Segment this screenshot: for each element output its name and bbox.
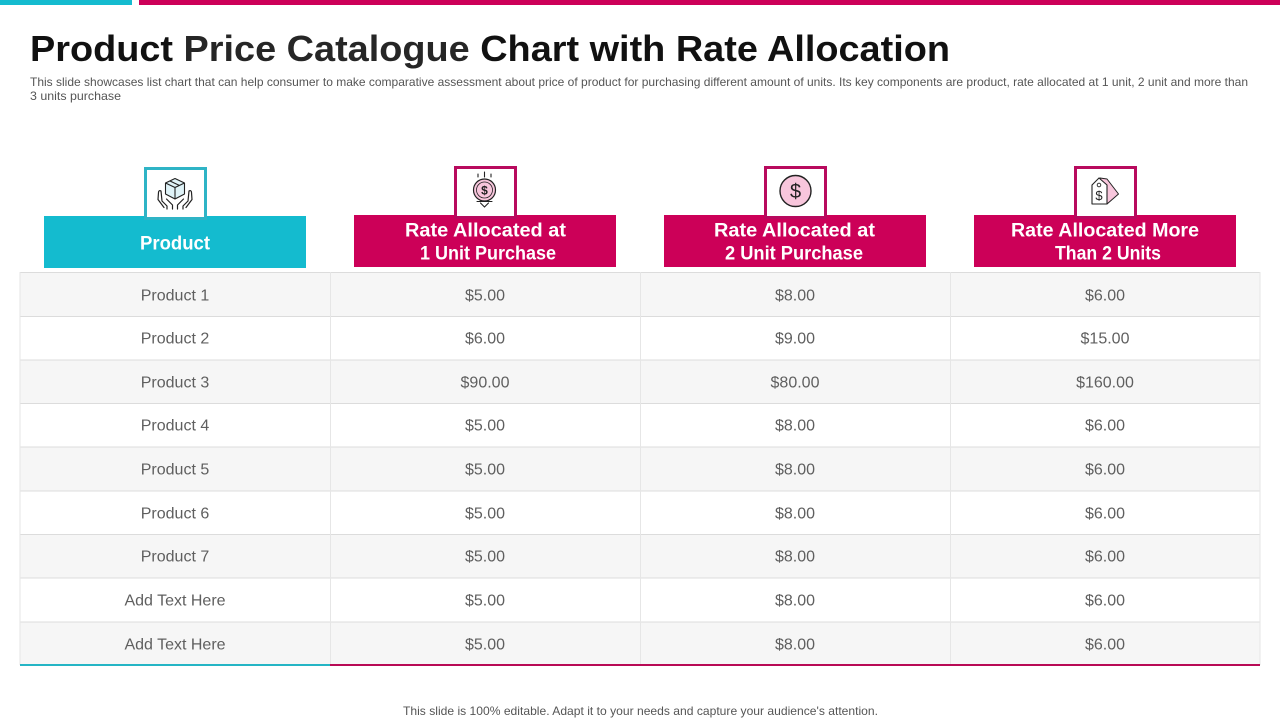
table <box>20 272 1260 666</box>
icon: price tags <box>1076 168 1136 218</box>
icon: dollar coin <box>766 168 826 218</box>
row: Product 2: $15.00 <box>1081 330 1130 348</box>
row: Product 1: $8.00 <box>775 288 815 304</box>
row: Product 7: $6.00 <box>1085 548 1125 566</box>
icon: price tags: $ <box>1095 188 1103 203</box>
row: Product 1: Product 1 <box>141 288 209 304</box>
row: Product 5: $5.00 <box>465 462 505 478</box>
row: Product 4 <box>141 418 1125 434</box>
row: Product 4: $8.00 <box>775 418 815 434</box>
row: Product 5: $8.00 <box>775 462 815 478</box>
row: Product 6 <box>141 506 1125 522</box>
row: Add Text Here 2 <box>124 636 1125 654</box>
column header: Rate Allocated at 1 Unit Purchase: Rate Allocated at <box>405 220 567 242</box>
row: Add Text Here 1: $8.00 <box>775 592 815 610</box>
row: Product 6: $8.00 <box>775 506 815 522</box>
footer note: This slide is 100% editable. Adapt it to your needs and capture your audience's attention. <box>403 704 878 718</box>
row: Product 3: Product 3 <box>141 374 209 392</box>
column header: Rate Allocated at 1 Unit Purchase: 1 Unit Purchase <box>420 244 556 264</box>
row: Product 2: $9.00 <box>775 330 815 348</box>
column header: Rate Allocated at 1 Unit Purchase <box>354 168 616 267</box>
row: Product 3: $80.00 <box>771 374 820 392</box>
description text: 3 units purchase <box>30 89 121 103</box>
icon: coin with down arrow <box>456 168 516 218</box>
row: Product 7 <box>141 548 1125 566</box>
description text <box>30 75 1248 103</box>
column header: Rate Allocated More Than 2 Units: Than 2 Units <box>1055 244 1161 264</box>
row: Product 6: $6.00 <box>1085 506 1125 522</box>
row: Product 4: $5.00 <box>465 418 505 434</box>
row: Product 3 <box>141 374 1134 392</box>
row: Add Text Here 2: $6.00 <box>1085 636 1125 654</box>
column header: Rate Allocated at 2 Unit Purchase: 2 Unit Purchase <box>725 244 863 264</box>
column header: Rate Allocated More Than 2 Units: Rate Allocated More <box>1011 220 1199 242</box>
row: Product 2 <box>141 330 1130 348</box>
row: Product 5 <box>141 462 1125 478</box>
row: Product 7: $8.00 <box>775 548 815 566</box>
row: Add Text Here 1 <box>124 592 1125 610</box>
icon: dollar coin: $ <box>790 181 801 203</box>
row: Product 1: $5.00 <box>465 288 505 304</box>
icon: hands holding box <box>146 168 206 218</box>
row: Add Text Here 1: Add Text Here <box>124 592 226 610</box>
row: Add Text Here 1: $5.00 <box>465 592 505 610</box>
column header: Rate Allocated at 2 Unit Purchase: Rate Allocated at <box>714 220 876 242</box>
top accent bar <box>0 0 1280 5</box>
row: Add Text Here 2: $8.00 <box>775 636 815 654</box>
row: Product 2: $6.00 <box>465 330 505 348</box>
column header: Product: Product <box>140 234 211 254</box>
row: Add Text Here 2: $5.00 <box>465 636 505 654</box>
row: Product 1: $6.00 <box>1085 288 1125 304</box>
row: Product 6: Product 6 <box>141 506 209 522</box>
row: Product 3: $90.00 <box>461 374 510 392</box>
description text: This slide showcases list chart that can help consumer to make comparative assessment about price of product for purchasing different amount of units. Its key components are product, rate allocated at 1 unit, 2 unit and more than <box>30 75 1248 89</box>
row: Product 6: $5.00 <box>465 506 505 522</box>
row: Add Text Here 2: Add Text Here <box>124 636 226 654</box>
row: Product 4: $6.00 <box>1085 418 1125 434</box>
column header: Rate Allocated More Than 2 Units <box>974 168 1236 267</box>
row: Product 4: Product 4 <box>141 418 209 434</box>
row: Product 7: Product 7 <box>141 548 209 566</box>
row: Add Text Here 1: $6.00 <box>1085 592 1125 610</box>
row: Product 7: $5.00 <box>465 548 505 566</box>
row: Product 1 <box>141 288 1125 304</box>
title: Product Price Catalogue Chart with Rate Allocation <box>30 28 950 69</box>
column header: Rate Allocated at 2 Unit Purchase <box>664 168 926 267</box>
row: Product 5: $6.00 <box>1085 462 1125 478</box>
column header: Product <box>44 168 306 268</box>
icon: coin with down arrow: $ <box>481 184 488 198</box>
row: Product 5: Product 5 <box>141 462 209 478</box>
row: Product 3: $160.00 <box>1076 374 1134 392</box>
row: Product 2: Product 2 <box>141 330 209 348</box>
